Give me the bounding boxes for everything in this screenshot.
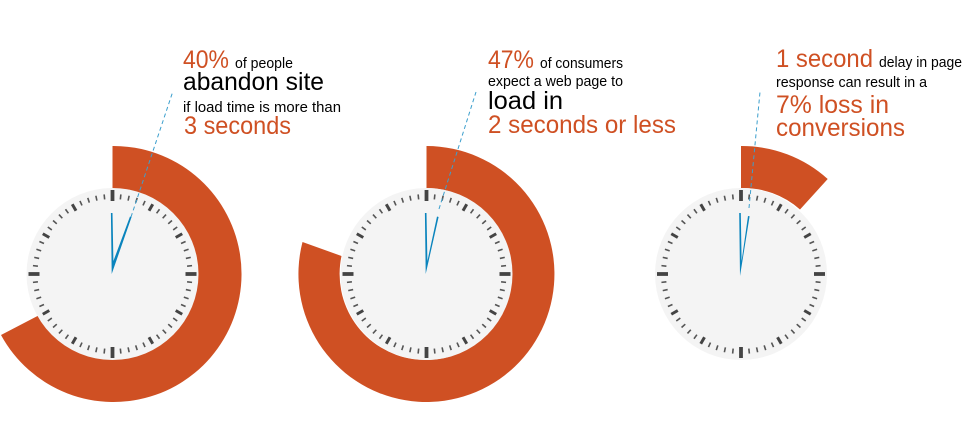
text: 40% of people abandon site: 3 seconds [184,112,291,140]
text: 1 second delay: delay in page [879,55,962,71]
text: 40% of people abandon site: 40% [183,46,229,74]
ring: load time arc, clock 1 [1,146,242,402]
text: 47% of consumers: load in [488,87,563,115]
text: 47% of consumers: expect a web page to [488,74,623,90]
panel: 1 second delay [652,45,962,363]
ring: load time arc, clock 2 [298,146,554,402]
clock face 1 [23,185,202,363]
text: 1 second delay [776,45,962,142]
text: 1 second delay: 1 second [776,45,873,73]
leader line 2 [439,92,476,209]
clock face 3 [652,185,830,363]
clock face 2 [337,185,516,363]
text: 40% of people abandon site: abandon site [183,68,324,96]
text: 40% of people abandon site: of people [235,56,293,72]
text: 1 second delay: response can result in a [776,75,928,91]
text: 40% of people abandon site [183,46,341,140]
clock hands 3 [739,213,750,276]
text: 47% of consumers: 2 seconds or less [488,111,676,139]
text: 40% of people abandon site: if load time is more than [183,100,341,116]
clock hands 2 [425,213,439,274]
panel: 40% abandon site [1,46,341,402]
text: 1 second delay: conversions [776,114,905,142]
text: 47% of consumers: 47% [488,46,534,74]
text: 47% of consumers: of consumers [540,56,623,72]
leader line 3 [749,92,760,208]
ring: load time arc, clock 3 [741,146,828,210]
clock hands 1 [111,213,132,274]
leader line 1 [131,91,173,217]
text: 1 second delay: 7% loss in [776,91,889,119]
text: 47% of consumers [488,46,676,139]
panel: 47% of consumers [298,46,676,402]
